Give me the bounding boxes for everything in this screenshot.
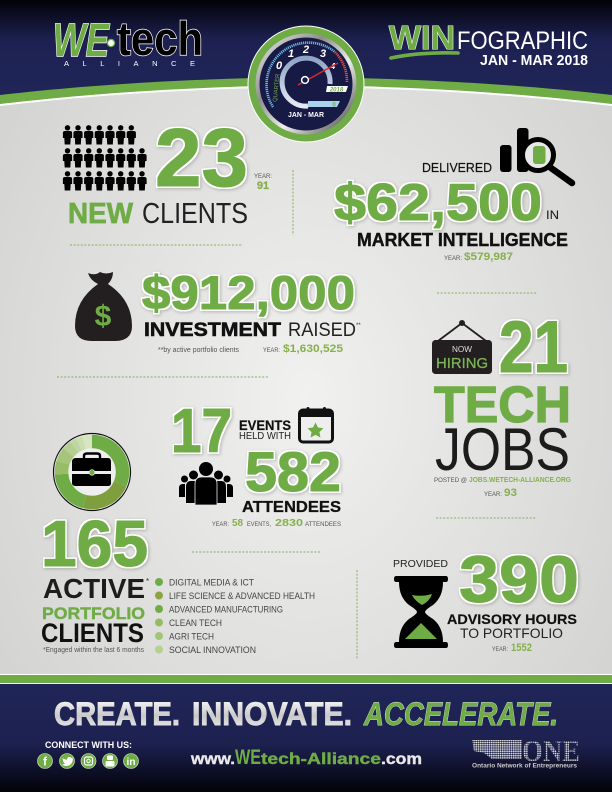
gauge: quarter speedometer: JAN - MAR <box>288 112 324 119</box>
title: WINfographic: FOGRAPHIC <box>457 27 588 55</box>
header band <box>0 0 612 106</box>
stat: investment raised: $912,000 <box>142 266 355 319</box>
stat: 390 advisory hours: YEAR: <box>492 646 508 653</box>
stat: investment raised <box>75 266 361 355</box>
stat: 390 advisory hours: PROVIDED <box>393 559 448 570</box>
logo: WE-tech Alliance: ALLIANCE <box>64 59 195 68</box>
gauge: quarter speedometer: 2 <box>302 44 309 56</box>
stat: 165 active portfolio clients: 165 <box>41 507 148 580</box>
icon: bars and magnifier <box>500 128 572 183</box>
stat: 21 tech jobs: YEAR: <box>484 491 502 498</box>
gauge: quarter speedometer: 0 <box>276 60 283 72</box>
gauge: quarter speedometer <box>248 26 364 142</box>
stat: 165 active portfolio clients <box>41 507 149 654</box>
stat: events and attendees: 17 <box>171 397 232 466</box>
stat: 390 advisory hours: ADVISORY HOURS <box>447 611 577 627</box>
icon: group of people <box>179 462 233 505</box>
icon: hourglass <box>394 576 448 648</box>
stat: events and attendees: 582 <box>245 440 341 503</box>
icon: portfolio donut with briefcase <box>54 434 130 510</box>
stat: 23 new clients: 23 <box>155 111 248 204</box>
tagline: CREATE. <box>54 696 180 732</box>
stat: investment raised: $1,630,525 <box>283 343 343 355</box>
stat: investment raised: RAISED <box>288 319 356 341</box>
stat: 23 new clients: 91 <box>257 180 269 192</box>
logo: WE-tech Alliance <box>53 12 203 68</box>
title: WINfographic: JAN - MAR 2018 <box>480 52 588 69</box>
stat: market intelligence: $62,500 <box>334 174 542 232</box>
stat: 23 new clients <box>63 111 272 230</box>
stat: 21 tech jobs: 21 <box>499 307 568 388</box>
stat: 21 tech jobs: 93 <box>504 487 517 499</box>
website url: WE <box>235 746 261 769</box>
website url: tech-Alliance <box>261 751 381 768</box>
stat: market intelligence: YEAR: <box>444 255 462 262</box>
stat: events and attendees: YEAR: <box>212 521 229 528</box>
legend: portfolio sectors: CLEAN TECH <box>169 618 222 629</box>
icon: now hiring sign <box>432 320 492 374</box>
stat: 21 tech jobs: TECH <box>434 376 571 433</box>
gauge: quarter speedometer: 3 <box>320 48 326 60</box>
social links: in <box>127 757 135 768</box>
stat: events and attendees: ATTENDEES <box>242 499 341 516</box>
stat: 23 new clients: CLIENTS <box>142 198 248 230</box>
stat: 165 active portfolio clients: PORTFOLIO <box>42 604 145 623</box>
stat: events and attendees: 2830 <box>275 518 304 529</box>
stat: 21 tech jobs <box>432 307 572 499</box>
stat: 390 advisory hours: TO PORTFOLIO <box>460 625 563 641</box>
stat: 390 advisory hours: 1552 <box>511 642 532 654</box>
legend: portfolio sectors: ADVANCED MANUFACTURING <box>169 604 283 616</box>
icon: calendar with star <box>300 407 332 442</box>
legend: portfolio sectors: LIFE SCIENCE & ADVANCED HEALTH <box>169 591 315 602</box>
stat: 390 advisory hours <box>393 542 579 654</box>
gauge: quarter speedometer: 4 <box>330 62 336 71</box>
tagline <box>54 696 558 732</box>
stat: events and attendees: HELD WITH <box>239 431 291 442</box>
stat: 390 advisory hours: 390 <box>459 542 579 616</box>
legend: portfolio sectors: AGRI TECH <box>169 632 214 642</box>
stat: market intelligence <box>334 128 572 263</box>
logo: Ontario Network of Entrepreneurs: Ontario Network of Entrepreneurs <box>472 762 577 770</box>
stat: investment raised: YEAR: <box>263 347 280 354</box>
stat: 165 active portfolio clients: CLIENTS <box>41 618 144 648</box>
stat: market intelligence: DELIVERED <box>422 160 492 175</box>
stat: 21 tech jobs: JOBS <box>435 416 570 483</box>
stat: 23 new clients: YEAR: <box>254 173 272 180</box>
stat: 21 tech jobs: POSTED @ <box>434 477 467 484</box>
social links <box>38 740 138 768</box>
stat: investment raised: ** <box>356 323 361 329</box>
title: WINfographic: WIN <box>389 19 455 56</box>
social links: f <box>43 754 48 768</box>
stat: investment raised: **by active portfolio clients <box>158 347 239 354</box>
icon: people grid <box>63 125 147 190</box>
icon: now hiring sign: HIRING <box>436 355 488 372</box>
stat: 21 tech jobs: JOBS.WETECH-ALLIANCE.ORG <box>469 477 572 484</box>
stat: 165 active portfolio clients: * <box>146 577 149 586</box>
logo: WE-tech Alliance: WE <box>53 14 110 66</box>
icon: money bag: $ <box>95 300 112 333</box>
stat: investment raised: INVESTMENT <box>144 319 281 341</box>
tagline: INNOVATE. <box>192 696 352 732</box>
stat: events and attendees: 58 <box>232 518 243 529</box>
stat: events and attendees: ATTENDEES <box>305 521 342 528</box>
gauge: quarter speedometer: 1 <box>288 48 294 60</box>
tagline: ACCELERATE. <box>363 696 558 732</box>
stat: 165 active portfolio clients: *Engaged within the last 6 months <box>43 647 144 654</box>
gauge: quarter speedometer: 0 <box>332 102 336 108</box>
website url: www. <box>190 751 235 768</box>
stat: market intelligence: IN <box>546 208 559 222</box>
social links: CONNECT WITH US: <box>45 740 132 751</box>
legend: portfolio sectors: SOCIAL INNOVATION <box>169 645 256 656</box>
website url: .com <box>381 751 422 768</box>
legend: portfolio sectors <box>155 578 315 656</box>
gauge: quarter speedometer: 2018 <box>329 88 344 94</box>
stat: market intelligence: $579,987 <box>464 251 513 263</box>
stat: 23 new clients: NEW <box>68 198 134 230</box>
logo: WE-tech Alliance: tech <box>117 12 203 65</box>
legend: portfolio sectors: DIGITAL MEDIA & ICT <box>169 578 254 588</box>
logo: Ontario Network of Entrepreneurs: ONE <box>522 733 580 768</box>
logo: Ontario Network of Entrepreneurs <box>472 733 580 770</box>
website url <box>190 746 422 769</box>
stat: events and attendees: EVENTS <box>239 417 291 433</box>
footer band <box>0 674 612 792</box>
stat: 165 active portfolio clients: ACTIVE <box>43 573 145 604</box>
stat: events and attendees: EVENTS, <box>247 521 271 528</box>
title: WINfographic <box>389 19 588 69</box>
gauge: quarter speedometer: QUARTER <box>273 74 281 102</box>
stat: events and attendees <box>171 397 342 529</box>
stat: market intelligence: MARKET INTELLIGENCE <box>357 230 568 250</box>
icon: money bag <box>75 272 132 341</box>
icon: now hiring sign: NOW <box>452 345 472 354</box>
